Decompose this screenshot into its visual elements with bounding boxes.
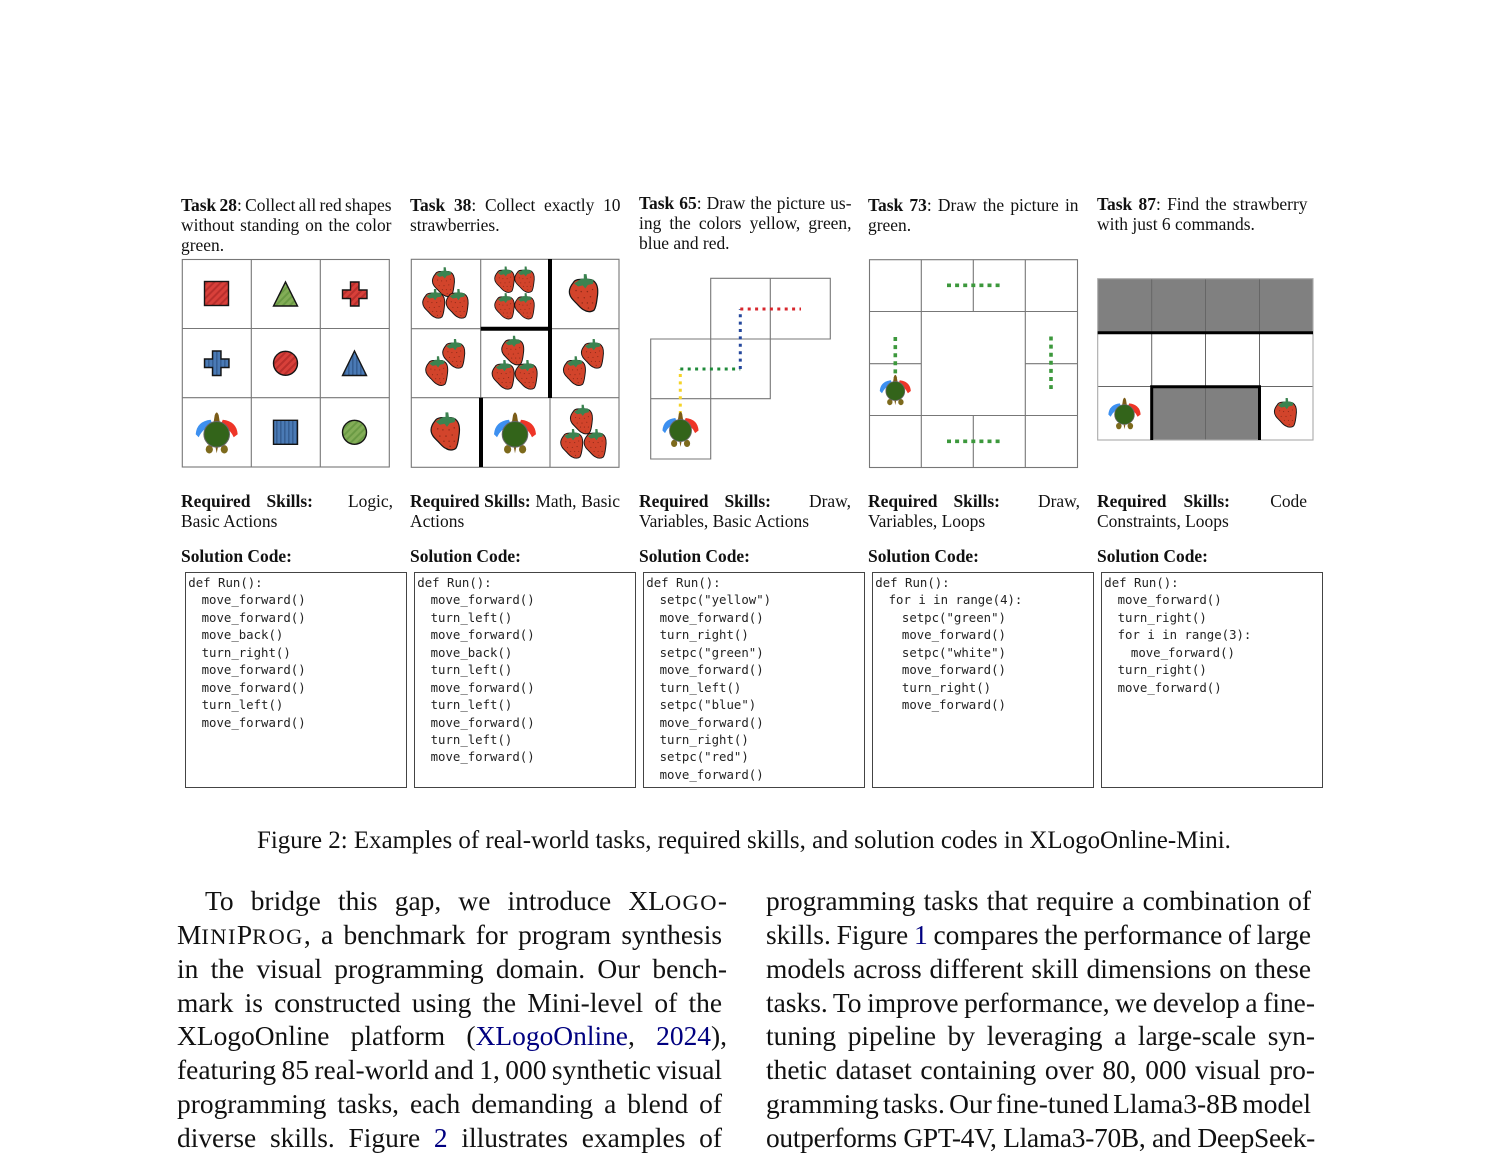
solution code box: turn_left() xyxy=(660,681,741,695)
panel: task 28 xyxy=(181,195,407,788)
panel: task 65 xyxy=(639,193,865,788)
task 73 description xyxy=(868,195,1079,235)
body text: right column: thetic dataset containing over 80, 000 visual pro- xyxy=(766,1055,1315,1085)
solution code box: turn_right() xyxy=(1118,611,1207,625)
solution code box: for i in range(4): xyxy=(889,593,1022,607)
solution code box: def Run(): xyxy=(646,576,721,590)
task 28 description: Task 28: Collect all red shapes xyxy=(181,195,392,215)
solution code box: turn_right() xyxy=(660,733,749,747)
panel: task 38 xyxy=(410,195,636,788)
task 87 description: with just 6 commands. xyxy=(1097,214,1255,234)
solution code box: turn_right() xyxy=(660,628,749,642)
solution code box: setpc("green") xyxy=(902,611,1006,625)
body text: right column: gramming tasks. Our fine-tuned Llama3-8B model xyxy=(766,1089,1311,1119)
solution code box: move_forward() xyxy=(202,716,306,730)
grid: coloured shapes and turtle xyxy=(182,258,390,468)
body text: left column: MINIPROG, a benchmark for program synthesis xyxy=(177,920,722,950)
body text: left column: XLogoOnline platform (XLogoOnline, 2024), xyxy=(177,1021,727,1051)
required skills: Required Skills: Math, Basic xyxy=(410,491,620,511)
figure caption: Figure 2: Examples of real-world tasks, required skills, and solution codes in XLogoOnline-Mini. xyxy=(257,827,1231,854)
task 73 description: Task 73: Draw the picture in xyxy=(868,195,1079,215)
body text: right column: programming tasks that require a combination of xyxy=(766,886,1311,916)
grid: walls, turtle and strawberry xyxy=(1097,278,1314,440)
required skills xyxy=(1097,491,1307,531)
solution code box: setpc("green") xyxy=(660,646,764,660)
required skills: Draw, xyxy=(1038,491,1080,511)
solution code box: def Run(): xyxy=(1104,576,1179,590)
solution code box: def Run(): xyxy=(875,576,950,590)
solution code box: move_forward() xyxy=(1118,681,1222,695)
grid: strawberries, turtle and walls xyxy=(410,258,620,468)
solution code box xyxy=(414,572,636,788)
required skills: Variables, Loops xyxy=(868,511,985,531)
solution code box: turn_left() xyxy=(431,733,512,747)
body text: right column xyxy=(766,886,1315,1153)
task 65 description: Task 65: Draw the picture us- xyxy=(639,193,852,213)
body text: left column xyxy=(177,886,727,1153)
required skills: Required Skills: xyxy=(868,491,1000,511)
drawing grid: coloured staircase path xyxy=(650,278,831,460)
task 38 description: strawberries. xyxy=(410,215,500,235)
solution code box: move_forward() xyxy=(431,628,535,642)
solution code box: def Run(): xyxy=(417,576,492,590)
body text: right column: skills. Figure 1 compares the performance of large xyxy=(766,920,1311,950)
required skills: Constraints, Loops xyxy=(1097,511,1229,531)
solution code box: move_forward() xyxy=(902,628,1006,642)
solution code box: turn_right() xyxy=(1118,663,1207,677)
solution code box: setpc("yellow") xyxy=(660,593,771,607)
drawing grid: green square outline xyxy=(868,259,1078,468)
required skills: Basic Actions xyxy=(181,511,277,531)
required skills: Variables, Basic Actions xyxy=(639,511,809,531)
solution code box: move_forward() xyxy=(431,681,535,695)
solution code box: move_forward() xyxy=(660,768,764,782)
panel: task 87 xyxy=(1097,194,1323,788)
body text: right column: tuning pipeline by leveraging a large-scale syn- xyxy=(766,1021,1315,1051)
solution code box: move_forward() xyxy=(1118,593,1222,607)
body text: right column: tasks. To improve performance, we develop a fine- xyxy=(766,988,1315,1018)
body text: left column: featuring 85 real-world and 1, 000 synthetic visual xyxy=(177,1055,722,1085)
solution code box: def Run(): xyxy=(188,576,263,590)
body text: left column: programming tasks, each demanding a blend of xyxy=(177,1089,722,1119)
solution code heading: Solution Code: xyxy=(181,546,292,566)
required skills: Required Skills: xyxy=(1097,491,1230,511)
solution code box xyxy=(872,572,1094,788)
solution code box: move_forward() xyxy=(431,750,535,764)
required skills xyxy=(639,491,851,531)
solution code heading: Solution Code: xyxy=(868,546,979,566)
solution code box: move_back() xyxy=(202,628,283,642)
required skills: Draw, xyxy=(809,491,851,511)
task 65 description: blue and red. xyxy=(639,233,730,253)
solution code box: move_forward() xyxy=(202,681,306,695)
solution code box xyxy=(1101,572,1323,788)
solution code box: move_back() xyxy=(431,646,512,660)
solution code box: move_forward() xyxy=(902,663,1006,677)
solution code box: setpc("white") xyxy=(902,646,1006,660)
solution code box: move_forward() xyxy=(902,698,1006,712)
task 87 description xyxy=(1097,194,1308,234)
solution code box: turn_left() xyxy=(431,663,512,677)
task 65 description: ing the colors yellow, green, xyxy=(639,213,852,233)
task 65 description xyxy=(639,193,852,253)
task 73 description: green. xyxy=(868,215,911,235)
task 28 description: green. xyxy=(181,235,224,255)
solution code box: turn_left() xyxy=(202,698,283,712)
solution code box: move_forward() xyxy=(660,611,764,625)
panel: task 73 xyxy=(868,195,1094,788)
solution code box: turn_right() xyxy=(902,681,991,695)
solution code box: setpc("red") xyxy=(660,750,749,764)
task 87 description: Task 87: Find the strawberry xyxy=(1097,194,1308,214)
task 28 description: without standing on the color xyxy=(181,215,392,235)
solution code box: move_forward() xyxy=(202,611,306,625)
solution code box: move_forward() xyxy=(431,716,535,730)
solution code heading: Solution Code: xyxy=(639,546,750,566)
required skills: Actions xyxy=(410,511,464,531)
required skills: Logic, xyxy=(348,491,393,511)
solution code box: turn_right() xyxy=(202,646,291,660)
task 28 description xyxy=(181,195,392,255)
required skills: Code xyxy=(1270,491,1307,511)
solution code box xyxy=(643,572,865,788)
task 38 description xyxy=(410,195,621,235)
body text: left column: in the visual programming domain. Our bench- xyxy=(177,954,727,984)
solution code box: for i in range(3): xyxy=(1118,628,1251,642)
required skills: Required Skills: xyxy=(639,491,771,511)
solution code box: move_forward() xyxy=(202,593,306,607)
solution code box: move_forward() xyxy=(1131,646,1235,660)
required skills xyxy=(181,491,393,531)
solution code box xyxy=(185,572,407,788)
solution code box: turn_left() xyxy=(431,611,512,625)
body text: left column: mark is constructed using the Mini-level of the xyxy=(177,988,722,1018)
solution code box: move_forward() xyxy=(660,663,764,677)
solution code box: move_forward() xyxy=(202,663,306,677)
solution code box: setpc("blue") xyxy=(660,698,756,712)
solution code box: move_forward() xyxy=(431,593,535,607)
solution code box: turn_left() xyxy=(431,698,512,712)
body text: left column: diverse skills. Figure 2 illustrates examples of xyxy=(177,1123,722,1153)
solution code heading: Solution Code: xyxy=(410,546,521,566)
required skills xyxy=(868,491,1080,531)
body text: right column: outperforms GPT-4V, Llama3-70B, and DeepSeek- xyxy=(766,1123,1315,1153)
body text: left column: To bridge this gap, we introduce XLOGO- xyxy=(205,886,727,916)
required skills xyxy=(410,491,620,531)
task 38 description: Task 38: Collect exactly 10 xyxy=(410,195,621,215)
solution code box: move_forward() xyxy=(660,716,764,730)
solution code heading: Solution Code: xyxy=(1097,546,1208,566)
body text: right column: models across different skill dimensions on these xyxy=(766,954,1311,984)
required skills: Required Skills: xyxy=(181,491,313,511)
